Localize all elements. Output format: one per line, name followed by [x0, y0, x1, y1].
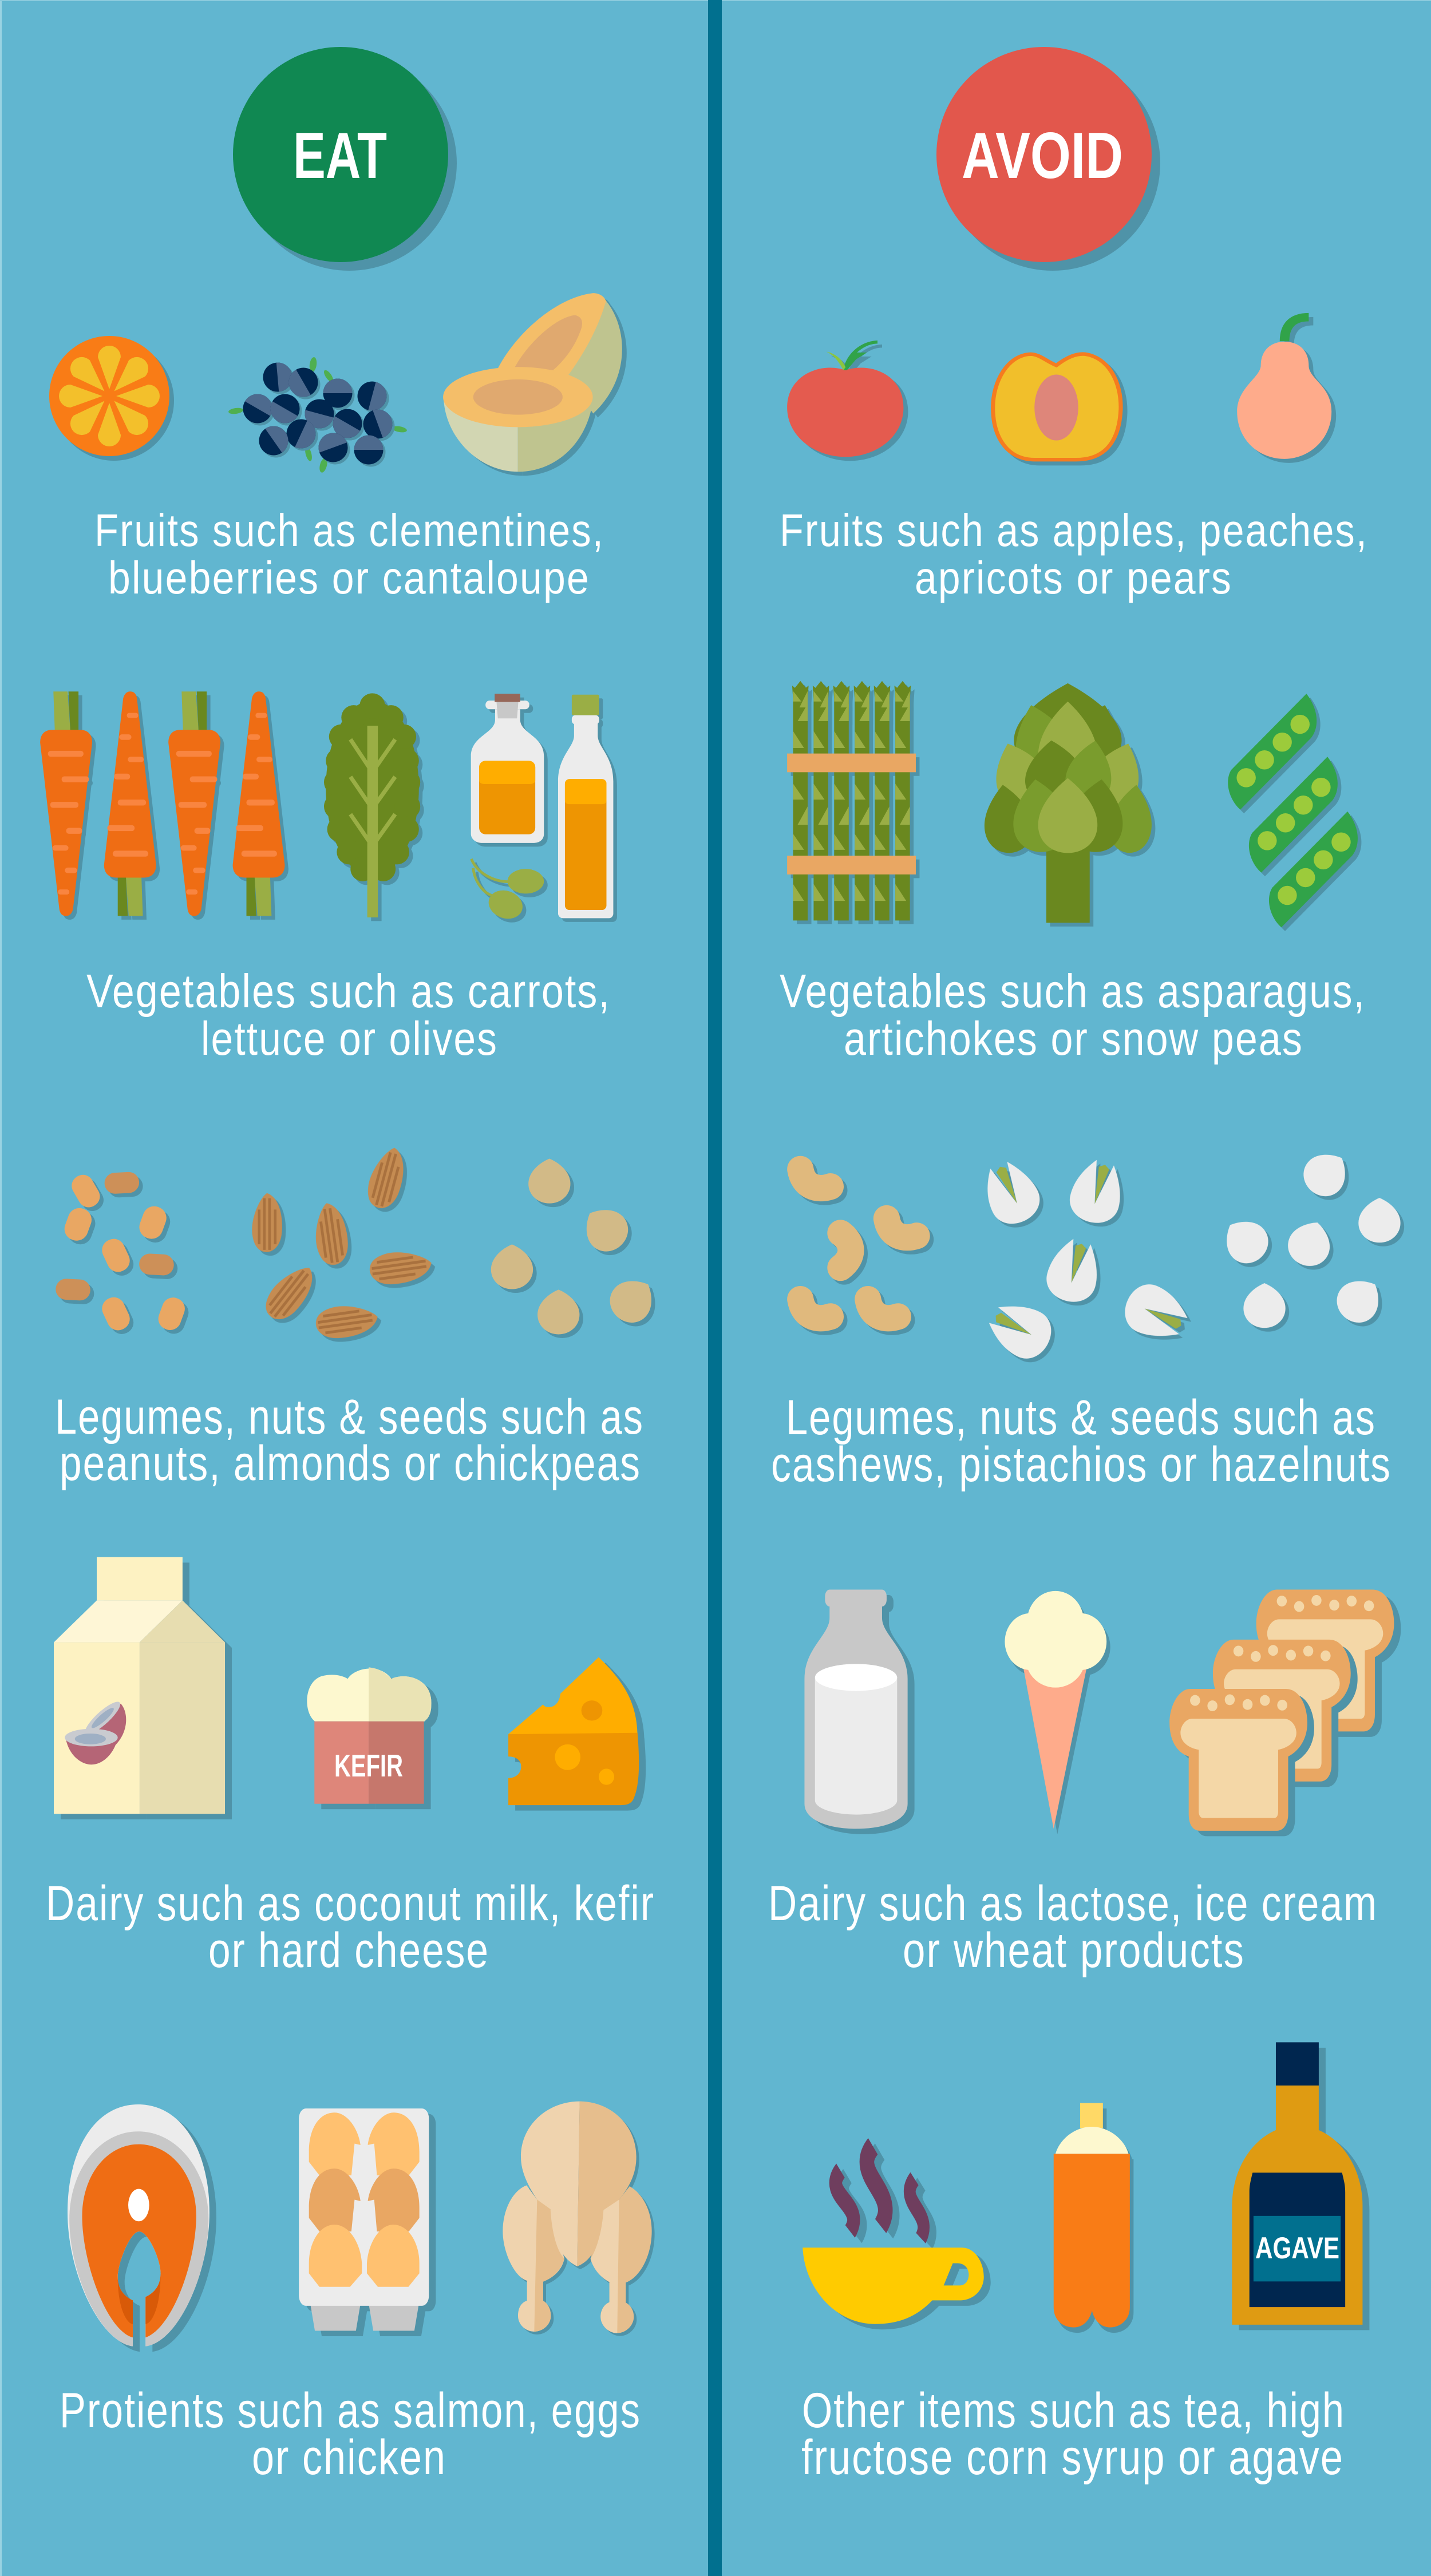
- row: avoid vegetables: [787, 681, 1358, 927]
- icon: milk bottle: [804, 1589, 908, 1829]
- icon: kefir container: KEFIR: [334, 1748, 403, 1783]
- icon: clementine: [49, 336, 169, 456]
- icon: apple: [787, 341, 903, 457]
- text: eat legumes: peanuts, almonds or chickpeas: [60, 1436, 641, 1491]
- text: eat dairy: Dairy such as coconut milk, kefir: [46, 1876, 655, 1931]
- icon: lettuce: [324, 693, 420, 917]
- row: avoid legumes, nuts and seeds: [800, 1143, 1401, 1366]
- icon: snow peas: [1228, 694, 1358, 927]
- text: avoid fruits: [780, 505, 1368, 603]
- icon: chickpeas: [491, 1159, 663, 1334]
- panel: avoid column: [768, 47, 1401, 2485]
- icon: hard cheese: [508, 1657, 639, 1805]
- icon: carrots: [40, 691, 284, 916]
- text: eat proteins: or chicken: [252, 2430, 446, 2485]
- center divider: [708, 0, 722, 2576]
- icon: coconut milk carton: [54, 1557, 225, 1814]
- text: eat legumes: [55, 1390, 644, 1491]
- row: eat proteins: [68, 2102, 652, 2347]
- text: avoid dairy: [768, 1876, 1378, 1978]
- row: avoid dairy: [804, 1589, 1394, 1831]
- heading badge: EAT: EAT: [293, 120, 387, 192]
- row: avoid fruits: [787, 317, 1331, 460]
- icon: bread slices: [1169, 1589, 1394, 1831]
- heading badge: AVOID: AVOID: [962, 120, 1123, 192]
- text: eat legumes: Legumes, nuts & seeds such as: [55, 1390, 644, 1445]
- text: eat dairy: or hard cheese: [208, 1923, 489, 1978]
- text: eat dairy: [46, 1876, 655, 1978]
- text: eat proteins: Protients such as salmon, eggs: [60, 2383, 641, 2438]
- icon: agave bottle: [1232, 2042, 1362, 2325]
- text: avoid fruits: apricots or pears: [915, 552, 1232, 603]
- icon: peach half: [993, 354, 1121, 460]
- icon: chicken: [503, 2102, 652, 2333]
- text: eat fruits: [94, 505, 604, 603]
- row: eat dairy: [54, 1557, 639, 1814]
- icon: almonds: [252, 1144, 434, 1341]
- icon: agave bottle: AGAVE: [1255, 2231, 1339, 2265]
- row: eat vegetables: [40, 691, 613, 923]
- heading badge: EAT: [233, 47, 448, 262]
- icon: cantaloupe: [443, 293, 622, 472]
- icon: pistachios: [975, 1154, 1195, 1366]
- text: eat vegetables: Vegetables such as carrots,: [86, 964, 611, 1018]
- icon: peanuts: [55, 1171, 188, 1334]
- icon: asparagus bundle: [787, 681, 916, 920]
- text: avoid vegetables: [780, 964, 1366, 1065]
- text: avoid other items: [801, 2383, 1345, 2485]
- panel: eat column: [40, 47, 663, 2485]
- heading badge: AVOID: [936, 47, 1152, 262]
- icon: hazelnuts: [1215, 1143, 1401, 1331]
- icon: ice cream cone: [1005, 1591, 1106, 1829]
- text: avoid vegetables: artichokes or snow peas: [844, 1012, 1303, 1065]
- row: avoid other items: [803, 2042, 1362, 2328]
- icon: salmon steak: [68, 2104, 209, 2347]
- text: eat vegetables: [86, 964, 611, 1065]
- icon: artichoke: [979, 683, 1157, 923]
- icon: blueberries: [228, 357, 408, 473]
- text: eat fruits: Fruits such as clementines,: [94, 505, 604, 556]
- icon: syrup bottle: [1054, 2103, 1130, 2328]
- text: eat vegetables: lettuce or olives: [201, 1012, 498, 1065]
- text: avoid legumes: [771, 1390, 1392, 1492]
- row: eat legumes, nuts and seeds: [55, 1144, 663, 1341]
- text: eat fruits: blueberries or cantaloupe: [108, 552, 590, 603]
- icon: pear: [1237, 317, 1331, 459]
- icon: cashews: [800, 1169, 917, 1318]
- text: avoid dairy: or wheat products: [903, 1923, 1245, 1978]
- icon: olive oil bottles and olives: [471, 694, 613, 923]
- row: eat fruits: [49, 293, 622, 473]
- text: eat proteins: [60, 2383, 641, 2485]
- icon: egg carton: [299, 2108, 429, 2331]
- icon: kefir container: [307, 1667, 432, 1804]
- icon: tea cup: [803, 2146, 984, 2324]
